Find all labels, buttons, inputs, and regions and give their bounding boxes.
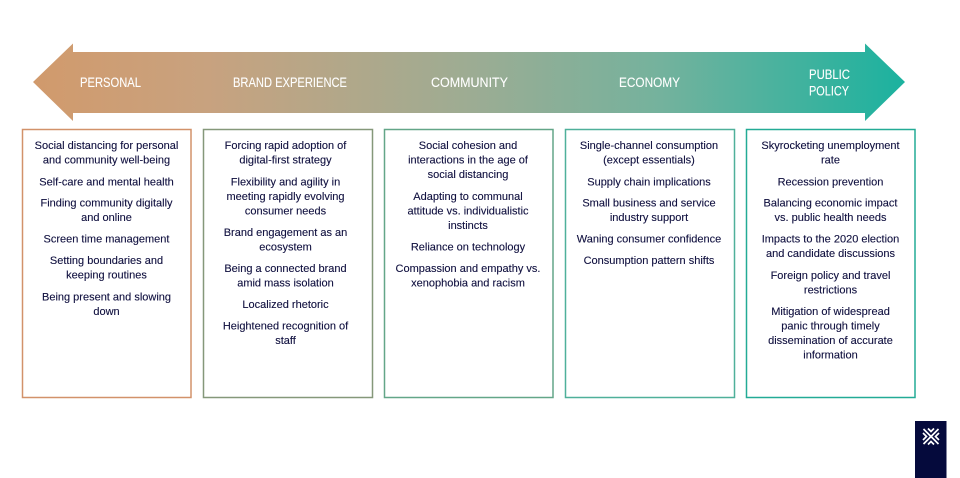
item: Setting boundaries and: [50, 255, 163, 267]
item: keeping routines: [66, 270, 147, 282]
icon: x chevrons: [923, 428, 939, 444]
item: Reliance on technology: [411, 242, 526, 254]
item: interactions in the age of: [408, 154, 529, 166]
item: attitude vs. individualistic: [407, 206, 529, 218]
label: public policy: PUBLIC: [809, 67, 850, 82]
label: public policy: POLICY: [809, 84, 849, 98]
item: Screen time management: [44, 234, 169, 246]
item: Balancing economic impact: [764, 198, 897, 210]
item: Waning consumer confidence: [577, 234, 721, 246]
item: dissemination of accurate: [768, 335, 893, 347]
item: Brand engagement as an: [224, 227, 347, 239]
item: Self-care and mental health: [39, 177, 174, 189]
item: rate: [821, 154, 840, 166]
item: information: [803, 350, 858, 362]
item: panic through timely: [781, 320, 880, 332]
panel: community: [384, 130, 553, 398]
label: brand experience: BRAND EXPERIENCE: [233, 75, 347, 90]
item: Forcing rapid adoption of: [225, 140, 346, 152]
label: public policy: [809, 67, 850, 98]
item: Consumption pattern shifts: [584, 255, 715, 267]
item: vs. public health needs: [775, 212, 887, 224]
item: and candidate discussions: [766, 248, 896, 260]
label: personal: PERSONAL: [80, 75, 141, 90]
item: Skyrocketing unemployment: [761, 140, 900, 152]
item: digital-first strategy: [239, 154, 332, 166]
item: (except essentials): [603, 154, 695, 166]
item: industry support: [610, 212, 688, 224]
item: Being a connected brand: [224, 263, 347, 275]
item: amid mass isolation: [237, 278, 334, 290]
item: Adapting to communal: [413, 191, 523, 203]
item: down: [93, 306, 120, 318]
item: Single-channel consumption: [580, 140, 718, 152]
item: instincts: [448, 220, 488, 232]
item: Compassion and empathy vs.: [396, 263, 540, 275]
item: Small business and service: [582, 198, 716, 210]
panel: public policy: [746, 130, 915, 398]
panel: economy: [566, 130, 734, 398]
item: Social cohesion and: [419, 140, 517, 152]
item: meeting rapidly evolving: [226, 191, 345, 203]
panel: brand experience: [204, 130, 372, 398]
item: and online: [81, 212, 132, 224]
item: Supply chain implications: [587, 177, 711, 189]
item: Heightened recognition of: [223, 320, 348, 332]
item: and community well-being: [43, 154, 170, 166]
item: xenophobia and racism: [411, 278, 525, 290]
item: Mitigation of widespread: [771, 306, 890, 318]
item: Social distancing for personal: [35, 140, 178, 152]
panel: personal: [22, 130, 191, 398]
item: Recession prevention: [778, 177, 883, 189]
item: restrictions: [804, 284, 858, 296]
item: social distancing: [428, 169, 508, 181]
item: consumer needs: [245, 206, 327, 218]
item: Being present and slowing: [42, 292, 171, 304]
item: Flexibility and agility in: [231, 177, 340, 189]
item: Impacts to the 2020 election: [762, 234, 899, 246]
item: ecosystem: [259, 242, 312, 254]
item: Localized rhetoric: [242, 299, 329, 311]
label: economy: ECONOMY: [619, 75, 680, 90]
logo block: [915, 421, 946, 478]
item: Foreign policy and travel: [771, 270, 890, 282]
item: Finding community digitally: [40, 198, 173, 210]
item: staff: [275, 335, 297, 347]
label: community: COMMUNITY: [431, 75, 508, 90]
double-headed gradient arrow: [33, 44, 905, 121]
